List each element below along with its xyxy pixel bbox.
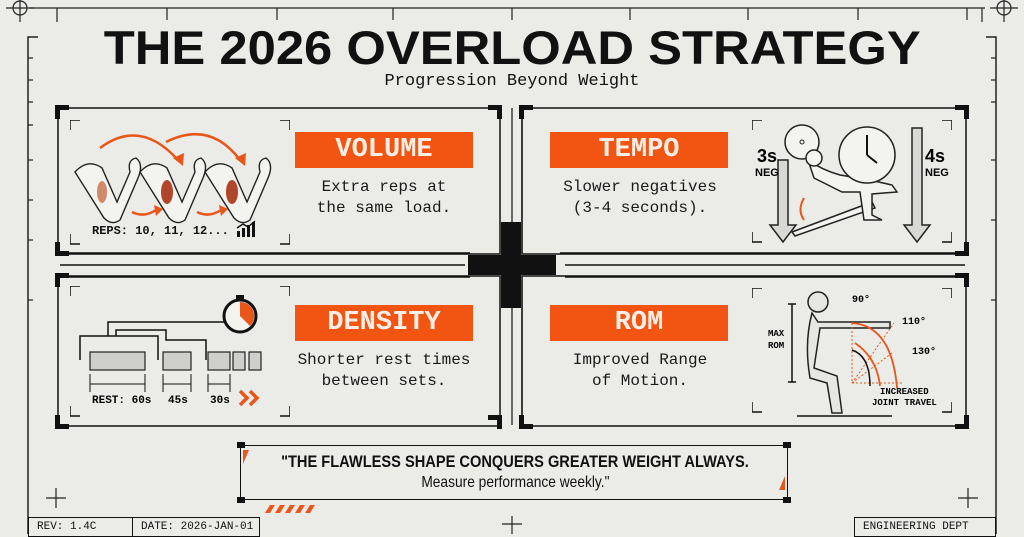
panel: volume [70, 120, 473, 245]
text: rom: of Motion. [592, 372, 688, 390]
callout: quote: Measure performance weekly." [421, 474, 609, 491]
icon: rest diagram [70, 286, 290, 417]
icon: chart [236, 220, 256, 237]
callout: quote [240, 445, 788, 500]
text: rom [573, 351, 707, 390]
icon: arms [70, 120, 290, 245]
callout: quote: "THE FLAWLESS SHAPE CONQUERS GREATER WEIGHT ALWAYS. [281, 452, 749, 471]
tag: density: DENSITY [327, 308, 441, 338]
icon: squat rom: MAX [768, 329, 785, 339]
text: density: Shorter rest times [298, 351, 470, 369]
icon: rest diagram: REST: 60s [92, 395, 151, 407]
text: tempo: (3-4 seconds). [573, 199, 707, 217]
icon: squat rom [752, 288, 952, 417]
icon: squat rom: 90° [852, 294, 870, 306]
icon: squat rom: 130° [912, 346, 936, 358]
tag: rom [550, 305, 728, 341]
panel: rom [550, 288, 952, 417]
icon: bench and clock: NEG [755, 167, 779, 179]
reps label: REPS: 10, 11, 12... [92, 224, 229, 238]
footer: date: DATE: 2026-JAN-01 [141, 521, 253, 533]
icon: bench and clock: 4s [925, 146, 945, 166]
icon: squat rom: INCREASED [880, 387, 929, 397]
text: volume: the same load. [317, 199, 451, 217]
icon: bench and clock: NEG [925, 167, 949, 179]
tag: volume [295, 132, 473, 168]
panel: tempo [550, 120, 952, 244]
icon: bench and clock: 3s [757, 146, 777, 166]
icon: squat rom: JOINT TRAVEL [872, 398, 937, 408]
text: rom: Improved Range [573, 351, 707, 369]
footer: date [132, 517, 260, 537]
central plus [468, 222, 556, 308]
panel: density [70, 286, 473, 417]
subtitle: Progression Beyond Weight [384, 72, 640, 91]
icon: rest diagram: 30s [210, 395, 230, 407]
icon: squat rom: ROM [768, 341, 784, 351]
tag: density [295, 305, 473, 341]
icon: bench and clock [752, 120, 952, 244]
text: tempo: Slower negatives [563, 178, 717, 196]
tag: tempo: TEMPO [598, 135, 680, 165]
text: tempo [563, 178, 717, 217]
title: THE 2026 OVERLOAD STRATEGY [103, 21, 921, 74]
tag: rom: ROM [615, 308, 663, 338]
text: volume: Extra reps at [322, 178, 446, 196]
text: density [298, 351, 470, 390]
icon: rest diagram: 45s [168, 395, 188, 407]
tag: volume: VOLUME [335, 135, 433, 165]
icon: squat rom: 110° [902, 316, 926, 328]
tag: tempo [550, 132, 728, 168]
footer: rev: REV: 1.4C [37, 521, 96, 533]
footer: dept: ENGINEERING DEPT [863, 521, 969, 533]
text: volume [317, 178, 451, 217]
footer: dept [854, 517, 996, 537]
footer: rev [28, 517, 133, 537]
text: density: between sets. [322, 372, 446, 390]
